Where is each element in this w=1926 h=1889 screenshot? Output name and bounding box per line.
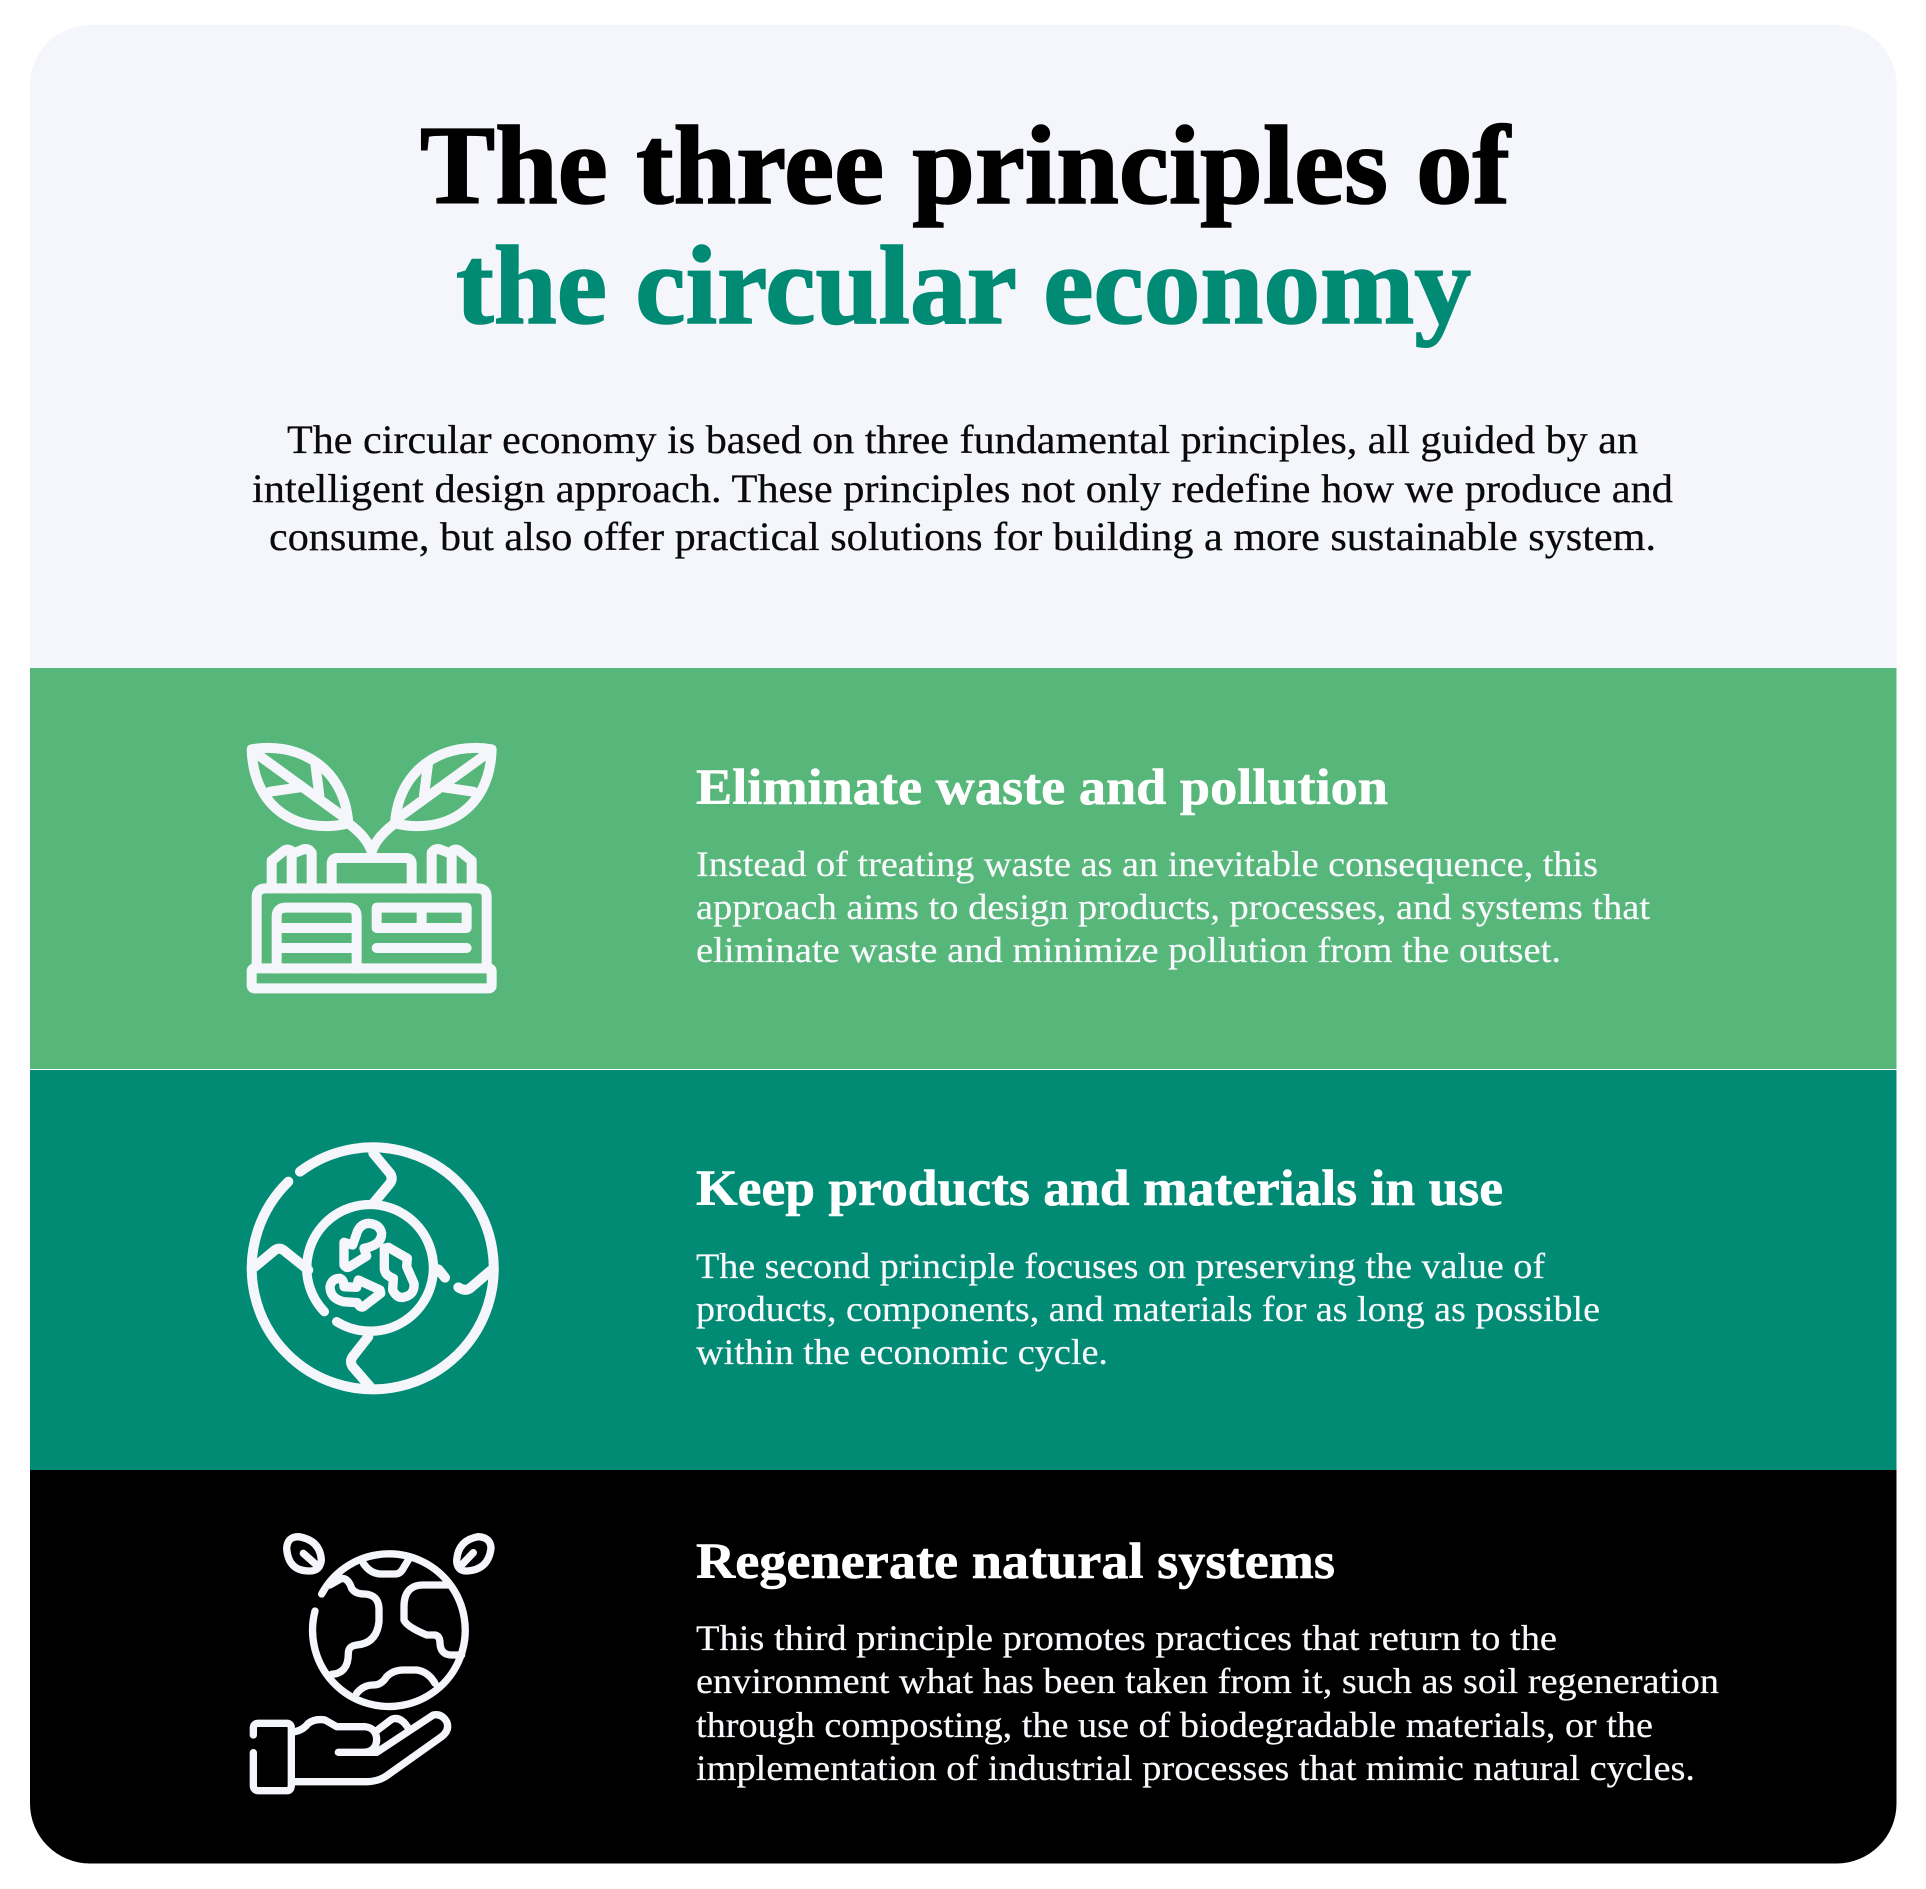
body: eliminate waste: Instead of treating waste as an inevitable consequence, this <box>696 844 1598 884</box>
body: regenerate: environment what has been taken from it, such as soil regeneration <box>696 1661 1719 1701</box>
intro text: The circular economy is based on three fundamental principles, all guided by an <box>287 417 1638 462</box>
body: regenerate <box>696 1618 1719 1788</box>
panel: keep products background <box>30 1070 1897 1470</box>
title: the circular economy <box>456 224 1471 348</box>
body: keep products: The second principle focuses on preserving the value of <box>696 1246 1545 1286</box>
body: regenerate: This third principle promotes practices that return to the <box>696 1618 1557 1658</box>
body: eliminate waste <box>696 844 1650 970</box>
icon: hand holding globe <box>253 1537 491 1791</box>
icon: factory with leaves <box>252 748 492 988</box>
body: keep products: products, components, and materials for as long as possible <box>696 1289 1600 1329</box>
icon: recycling globe <box>252 1147 494 1389</box>
title <box>420 104 1512 348</box>
heading: keep products: Keep products and materials in use <box>696 1161 1503 1217</box>
body: eliminate waste: approach aims to design products, processes, and systems that <box>696 887 1650 927</box>
body: regenerate: through composting, the use of biodegradable materials, or the <box>696 1705 1653 1745</box>
body: keep products <box>696 1246 1600 1372</box>
panel: header background <box>30 25 1897 669</box>
body: keep products: within the economic cycle. <box>696 1332 1108 1372</box>
intro text: intelligent design approach. These principles not only redefine how we produce and <box>252 466 1673 511</box>
panel: regenerate background <box>30 1470 1897 1864</box>
heading: eliminate waste: Eliminate waste and pollution <box>696 760 1388 816</box>
intro text <box>252 417 1673 559</box>
heading: regenerate: Regenerate natural systems <box>696 1534 1335 1590</box>
title: The three principles of <box>420 104 1512 228</box>
body: regenerate: implementation of industrial processes that mimic natural cycles. <box>696 1748 1695 1788</box>
body: eliminate waste: eliminate waste and minimize pollution from the outset. <box>696 930 1561 970</box>
intro text: consume, but also offer practical solutions for building a more sustainable system. <box>269 514 1656 559</box>
panel: eliminate waste background <box>30 668 1897 1069</box>
